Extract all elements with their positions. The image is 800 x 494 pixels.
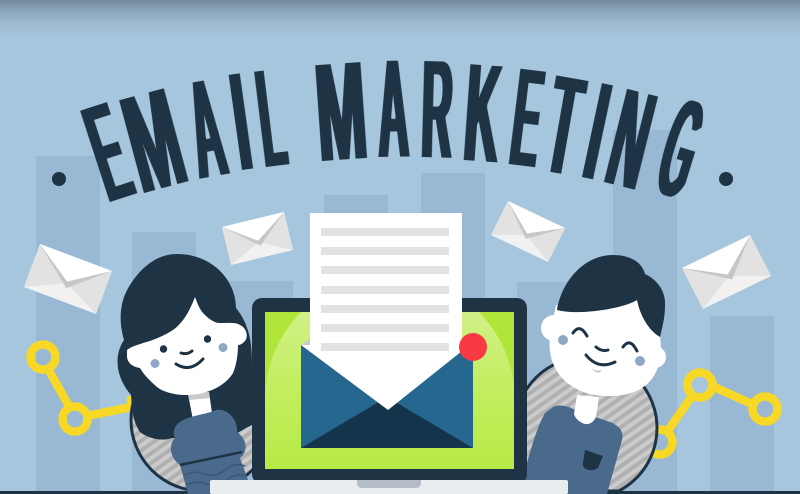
title dot left [52,172,66,186]
notification dot [459,333,487,361]
envelope body [301,345,473,448]
icon: envelope far right [682,235,771,309]
yellow line chart left [30,344,131,432]
man eyes [573,329,637,351]
laptop notch [357,480,421,488]
screen glow [265,312,514,469]
man ears [541,315,666,368]
title: T [535,44,593,207]
woman nose and smile [176,351,203,368]
woman hair [118,254,252,440]
floor line [0,491,800,494]
woman cheeks [150,343,228,368]
laptop base [210,480,568,494]
striped circle behind woman [131,349,273,491]
title: R [420,29,454,190]
man face [549,298,661,396]
man hair [557,255,665,337]
letter text lines [321,228,449,351]
yellow line chart right [648,372,778,454]
title [69,29,718,233]
laptop screen [265,312,514,469]
title: A [178,48,235,211]
envelope front flap [301,397,473,448]
title: N [595,57,667,221]
icon: envelope left [24,244,112,314]
woman sweater band [180,452,242,465]
woman eyes [160,335,211,353]
title: M [109,57,199,225]
man chin shadow [591,368,602,373]
top shadow band [0,0,800,36]
laptop body [252,298,527,484]
title: K [460,31,506,195]
man cheeks [558,335,645,366]
woman sweater [171,410,248,494]
man [520,255,666,494]
grey corner [301,338,311,350]
title dot right [719,172,733,186]
man sweater [520,406,622,494]
man neck [574,395,599,424]
woman face [127,297,247,395]
envelope [301,213,487,448]
laptop [210,298,568,494]
striped circle behind man [515,357,657,491]
title: E [504,37,550,200]
icon: envelope centre left [222,212,293,265]
title: L [250,38,293,200]
title: I [223,40,259,202]
icon: envelope centre right [491,201,565,262]
title: E [69,70,147,233]
title: I [574,50,621,211]
woman neck [188,392,213,425]
man nose and smile [586,347,615,365]
woman [118,254,252,494]
man pocket [583,450,603,470]
title: A [377,29,410,190]
letter [301,213,462,410]
background bar chart [36,130,774,494]
title: G [643,69,718,230]
title: M [311,30,371,194]
